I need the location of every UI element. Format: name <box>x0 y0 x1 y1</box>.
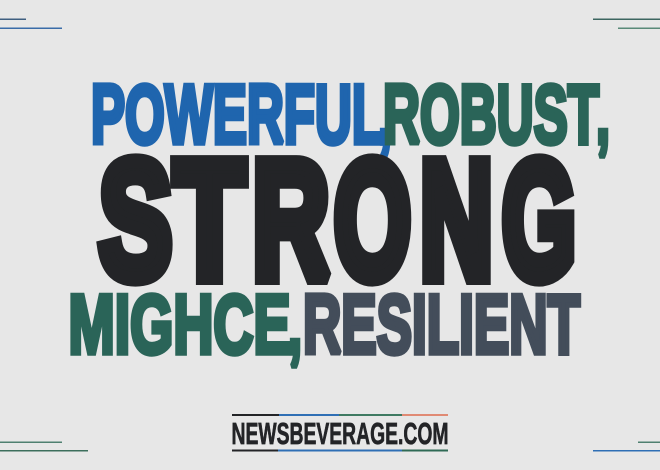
headline: STRONG: G <box>502 128 576 314</box>
word: POWERFUL,: POWERFUL <box>91 67 383 161</box>
logo: NEWSBEVERAGE.COM: NEWSBEVERAGE.COM <box>232 416 448 451</box>
decorative lines: bottom right <box>593 442 660 452</box>
word: POWERFUL, <box>91 67 392 161</box>
decorative lines: top left <box>0 18 62 29</box>
decorative lines: top right <box>593 18 660 29</box>
headline: STRONG: S <box>99 128 172 314</box>
headline: STRONG <box>99 128 576 314</box>
headline: STRONG: T <box>174 128 245 314</box>
decorative lines: bottom left <box>0 442 88 452</box>
headline: STRONG: O <box>334 128 411 314</box>
word: POWERFUL,: , <box>378 67 392 161</box>
word: MIGHCE, <box>68 277 302 371</box>
word: MIGHCE,: , <box>288 277 302 371</box>
word: ROBUST,: , <box>596 67 610 161</box>
headline: STRONG: N <box>420 128 493 314</box>
word: MIGHCE,: MIGHCE <box>68 277 290 371</box>
headline: STRONG: R <box>252 128 330 314</box>
